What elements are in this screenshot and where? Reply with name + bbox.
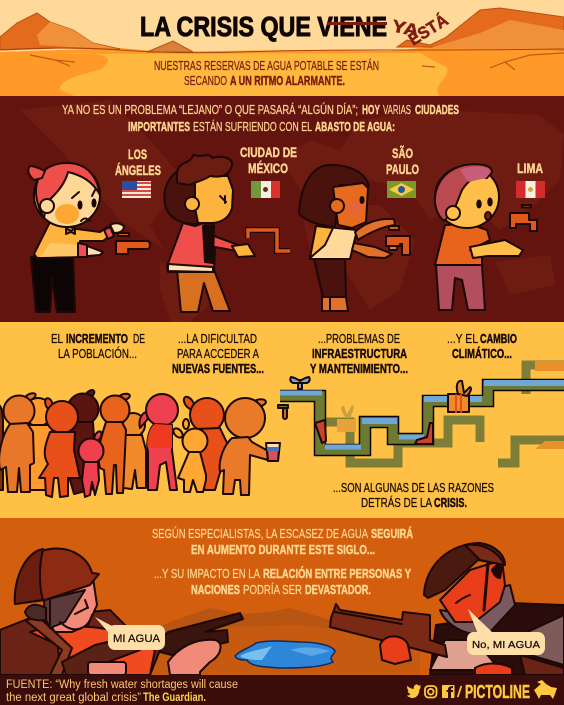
faded patches on background pipes	[337, 361, 564, 449]
text: impact: ...Y SU IMPACTO EN LA	[154, 566, 260, 581]
label: Los Ángeles	[115, 146, 161, 178]
hills and ground	[130, 608, 420, 675]
person 3 dress	[39, 397, 80, 497]
title: LA CRISIS QUE VIENE	[140, 11, 387, 42]
character: Los Ángeles resident	[28, 163, 124, 312]
text: climate change: CAMBIO	[480, 331, 517, 346]
person 8	[139, 394, 178, 490]
person 9	[182, 395, 228, 490]
character: Ciudad de México resident	[164, 155, 255, 312]
source text	[6, 679, 238, 704]
label: Ciudad de México	[240, 144, 297, 176]
speech bubble: Mi agua: MI AGUA	[113, 633, 161, 645]
source text: FUENTE: “Why fresh water shortages will cause	[6, 679, 238, 691]
text: population: EL	[51, 331, 63, 346]
faucet: Lima	[510, 205, 537, 231]
panel: conflict scene	[0, 515, 564, 675]
character: São Paulo resident	[299, 165, 395, 311]
label: Ciudad de México: CIUDAD DE	[240, 144, 297, 160]
text: new sources: ...LA DIFICULTAD	[178, 331, 257, 346]
background pipes	[325, 365, 564, 463]
crowd of people	[0, 388, 270, 497]
person 4 dark	[68, 388, 98, 494]
icon: goat logo	[534, 680, 557, 699]
text: new sources	[172, 331, 264, 376]
subtitle: NUESTRAS RESERVAS DE AGUA POTABLE SE ESTÁN	[154, 58, 379, 73]
icon: twitter	[407, 684, 421, 698]
water puddle	[235, 641, 335, 668]
label: São Paulo: SÃO	[392, 144, 413, 161]
text: impact: PODRÍA SER	[243, 582, 302, 597]
label: São Paulo: PAULO	[386, 161, 419, 177]
text: specialists	[152, 526, 413, 557]
flag: Brazil	[387, 181, 416, 198]
person 6	[98, 393, 131, 494]
text: Pictoline handle: PICTOLINE	[465, 682, 530, 702]
glass of water	[266, 443, 280, 461]
right soldier rifle and hands	[330, 604, 564, 675]
text: specialists: EN AUMENTO DURANTE ESTE SIGLO...	[191, 542, 375, 557]
subtitle: SECANDO	[184, 73, 227, 88]
text: population	[51, 331, 145, 361]
person 5 child	[78, 430, 104, 497]
person 10 child	[172, 419, 208, 492]
icon: instagram	[425, 686, 436, 698]
text: specialists: SEGUIRÁ	[371, 526, 413, 541]
soldier: left	[0, 549, 160, 675]
text: climate change: CLIMÁTICO...	[452, 346, 512, 361]
text: population: DE	[133, 331, 145, 346]
text: population: INCREMENTO	[66, 331, 128, 346]
person 2 behind	[24, 398, 52, 490]
pipe patches	[315, 381, 471, 444]
label: Los Ángeles: LOS	[128, 146, 147, 162]
source text: the next great global crisis”	[6, 692, 141, 704]
subtitle: A UN RITMO ALARMANTE.	[230, 73, 345, 88]
flag: Peru	[516, 181, 545, 198]
text: new sources: PARA ACCEDER A	[177, 346, 259, 361]
intro text: VARIAS	[383, 102, 411, 117]
text: impact	[154, 566, 411, 597]
character: Lima resident	[435, 164, 523, 310]
text: infrastructure: Y MANTENIMIENTO...	[310, 361, 408, 376]
person 7 ponytail	[121, 413, 146, 489]
text: Pictoline handle	[457, 682, 530, 702]
intro text	[62, 102, 459, 134]
text: specialists: SEGÚN ESPECIALISTAS, LA ESCASEZ DE AGUA	[152, 526, 368, 541]
label: Lima: LIMA	[517, 160, 543, 176]
flag: USA	[122, 181, 151, 198]
text: impact: DEVASTADOR.	[305, 582, 371, 597]
intro text: YA NO ES UN PROBLEMA “LEJANO” O QUE PASARÁ “ALGÚN DÍA”;	[62, 102, 358, 117]
intro text: ABASTO DE AGUA:	[315, 119, 395, 134]
text: population: LA POBLACIÓN...	[58, 346, 137, 361]
faucet: São Paulo	[386, 226, 410, 255]
text: impact: NACIONES	[191, 582, 240, 597]
intro text: IMPORTANTES	[128, 119, 190, 134]
text: infrastructure: ...PROBLEMAS DE	[318, 331, 400, 346]
text: reasons	[333, 480, 494, 510]
panel: causes	[0, 322, 564, 517]
panel: cities with water problems	[0, 96, 564, 322]
text: climate change	[447, 331, 517, 361]
world map background	[20, 100, 564, 322]
speech bubble: No, mi agua: No, MI AGUA	[472, 639, 540, 651]
subtitle	[154, 58, 379, 88]
faucet: Ciudad de México	[248, 230, 290, 251]
intro text: HOY	[362, 102, 380, 117]
flag: Mexico	[251, 181, 280, 198]
intro text: CIUDADES	[415, 102, 459, 117]
text: new sources: NUEVAS FUENTES...	[172, 361, 264, 376]
text: infrastructure: INFRAESTRUCTURA	[312, 346, 407, 361]
intro text: ESTÁN SUFRIENDO CON EL	[193, 119, 312, 134]
panel: desert header	[0, 0, 564, 97]
icon: facebook	[442, 685, 454, 698]
main water pipe with faucet	[280, 383, 564, 450]
speech bubble: No, mi agua	[467, 609, 545, 655]
text: impact: RELACIÓN ENTRE PERSONAS Y	[263, 566, 411, 581]
person 11 with glass	[220, 398, 270, 495]
text: infrastructure	[310, 331, 408, 376]
text: Pictoline handle: /	[457, 684, 463, 701]
speech bubble: Mi agua	[95, 617, 165, 650]
title: YA	[390, 16, 421, 41]
text: reasons: ...SON ALGUNAS DE LAS RAZONES	[333, 480, 494, 495]
label: Los Ángeles: ÁNGELES	[115, 162, 161, 178]
title: ESTÁ	[405, 10, 452, 49]
label: São Paulo	[386, 144, 419, 177]
left soldier rifle and hands	[62, 613, 243, 675]
text: reasons: CRISIS.	[434, 495, 467, 510]
faucet: Los Ángeles	[116, 233, 150, 254]
text: reasons: DETRÁS DE LA	[361, 495, 432, 510]
source text: The Guardian.	[143, 692, 206, 704]
label: Ciudad de México: MÉXICO	[248, 160, 288, 176]
person 1	[0, 392, 37, 492]
panel: footer	[0, 675, 564, 705]
text: climate change: ...Y EL	[447, 331, 478, 346]
soldier: right	[424, 543, 564, 675]
faucet: dripping tap	[278, 377, 310, 419]
